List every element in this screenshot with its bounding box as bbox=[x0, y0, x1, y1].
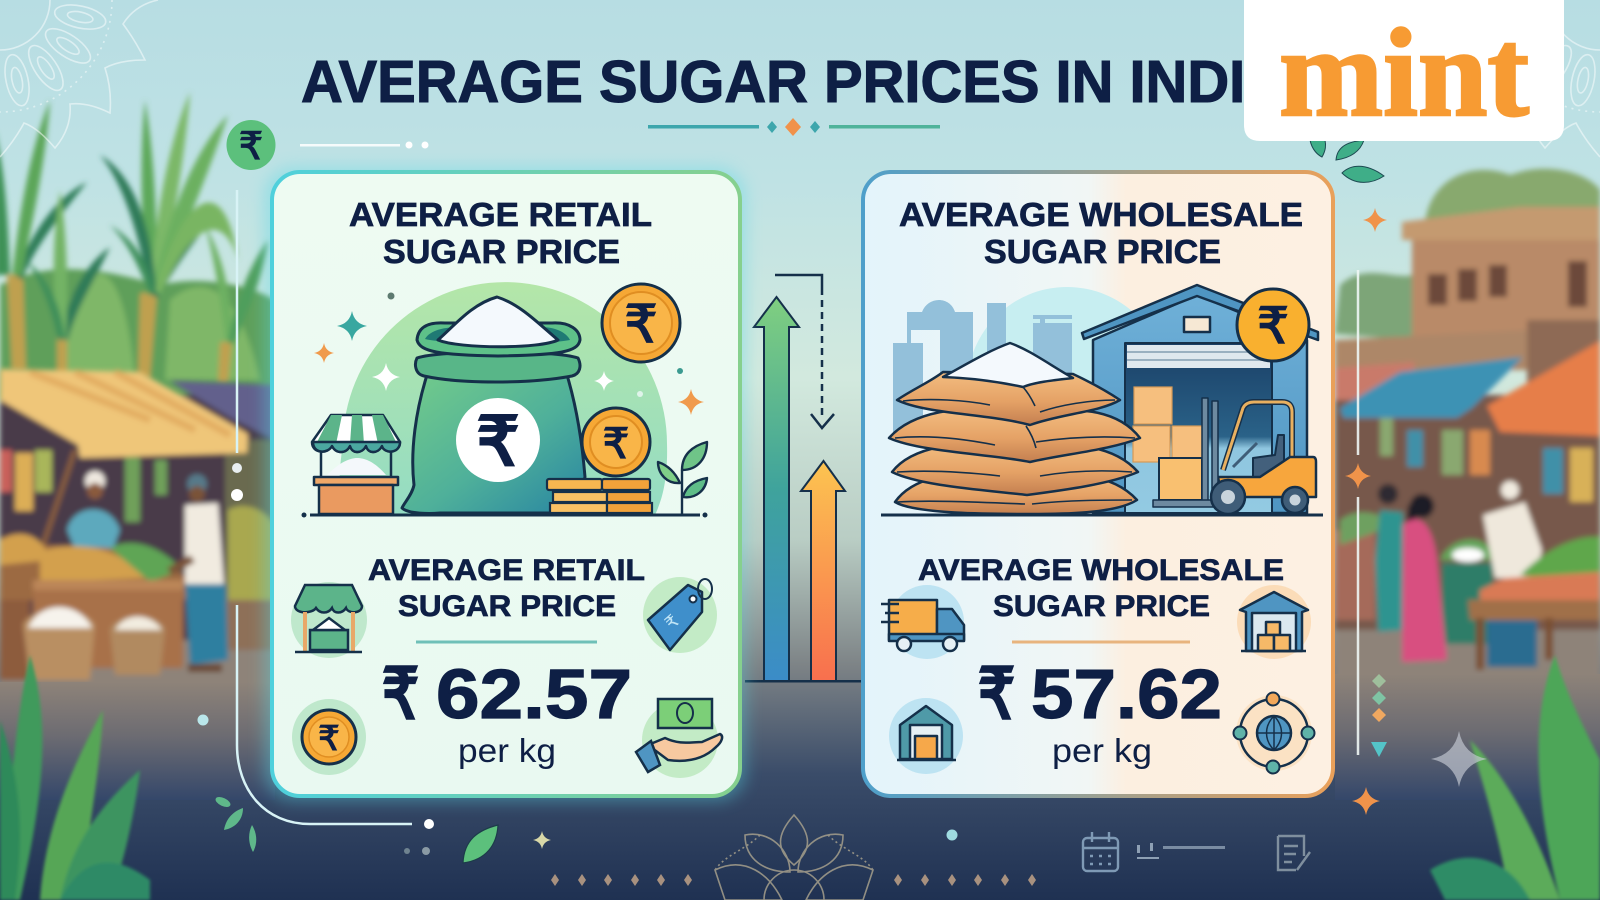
heading: retail bbox=[349, 196, 652, 270]
left card glow bbox=[264, 167, 746, 801]
icon: warehouse coin: ₹ bbox=[1257, 298, 1289, 354]
illustration: sugar bag scene bbox=[302, 282, 708, 518]
heading: retail: AVERAGE RETAIL bbox=[349, 196, 652, 233]
icon: small coin: ₹ bbox=[603, 420, 629, 467]
icon: warehouse coin bbox=[1237, 289, 1309, 361]
background: foreground plants bbox=[0, 655, 1600, 900]
subheading: wholesale bbox=[918, 554, 1284, 623]
icon: global network bbox=[1234, 692, 1314, 774]
decoration: small leaves bottom left bbox=[214, 795, 256, 852]
icon: green bag bbox=[402, 297, 585, 513]
background: left market stall bbox=[0, 369, 275, 700]
sugar sacks bbox=[889, 343, 1140, 514]
stacked boxes bbox=[1133, 387, 1202, 462]
icon: green rupee badge: ₹ bbox=[239, 126, 263, 168]
heading: retail: SUGAR PRICE bbox=[383, 233, 620, 270]
icon: truck badge bbox=[881, 585, 964, 659]
price: retail: ₹ bbox=[382, 655, 419, 733]
subheading: wholesale: AVERAGE WHOLESALE bbox=[918, 554, 1284, 587]
illustration: sugar bag scene: ₹ bbox=[476, 404, 520, 480]
icon: small coin bbox=[582, 408, 650, 476]
green blue arrow bbox=[754, 297, 799, 681]
decoration: right diamonds and triangle bbox=[1371, 674, 1387, 757]
icon: market stall bbox=[312, 415, 400, 514]
decoration: bottom diamond rows bbox=[551, 874, 1036, 886]
subheading: retail: AVERAGE RETAIL bbox=[368, 554, 645, 587]
subheading: retail: SUGAR PRICE bbox=[398, 590, 616, 623]
icon: price tag badge bbox=[643, 577, 717, 653]
decoration: left connector line bbox=[198, 190, 434, 855]
background: right ground bbox=[1335, 674, 1600, 800]
icon: large coin bbox=[602, 284, 680, 362]
price: wholesale: ₹ bbox=[978, 655, 1015, 733]
heading: wholesale: AVERAGE WHOLESALE bbox=[899, 196, 1303, 233]
icon: cash in hand bbox=[636, 699, 722, 778]
heading: wholesale bbox=[899, 196, 1303, 270]
panel: retail price card bbox=[272, 172, 740, 796]
decoration: white line and dots top left bbox=[300, 142, 428, 148]
decoration: top-right mandala bbox=[1442, 0, 1600, 157]
unit: per kg: per kg bbox=[1052, 732, 1152, 769]
icon: warehouse blue badge bbox=[889, 698, 963, 774]
decoration: top-left mandala bbox=[0, 0, 158, 157]
title: AVERAGE SUGAR PRICES IN INDIA bbox=[301, 49, 1287, 115]
icon: coin badge: ₹ bbox=[318, 720, 340, 758]
background: left ground bbox=[0, 682, 275, 800]
logo: mint: mint bbox=[1279, 4, 1529, 143]
icon: small star outline bbox=[533, 831, 551, 849]
skyline bbox=[893, 287, 1167, 487]
title ornament divider bbox=[648, 118, 940, 136]
icon: stall badge bbox=[291, 582, 367, 658]
center comparison arrows bbox=[745, 275, 863, 682]
illustration: warehouse scene bbox=[881, 285, 1323, 516]
background: sugarcane field bbox=[0, 92, 275, 400]
icon: green rupee badge bbox=[226, 120, 276, 170]
background: right market building bbox=[1335, 169, 1600, 690]
icon: calendar bbox=[1083, 832, 1118, 871]
forklift bbox=[1153, 398, 1316, 514]
icon: green leaf bbox=[463, 825, 498, 863]
price: retail: 62.57 bbox=[436, 655, 632, 733]
decoration: bottom-centre mandala bbox=[715, 815, 873, 900]
decoration: green leaves under logo bbox=[1310, 140, 1384, 182]
icon: price tag badge: ₹ bbox=[661, 611, 683, 633]
decoration: footer fading line bbox=[1137, 843, 1225, 859]
icon: warehouse tan badge bbox=[1237, 585, 1311, 659]
decoration: floating teal dot bbox=[946, 830, 958, 840]
icon: large coin: ₹ bbox=[624, 296, 658, 354]
unit: per kg: per kg bbox=[458, 732, 556, 769]
decoration: orange sparkles right bbox=[1345, 208, 1387, 815]
panel: wholesale price card bbox=[863, 172, 1333, 796]
dashed down arrow bbox=[775, 275, 834, 428]
warehouse bbox=[1082, 285, 1318, 513]
icon: coin stack bbox=[547, 479, 652, 513]
icon: coin badge bbox=[292, 699, 366, 775]
icon: notes bbox=[1278, 836, 1310, 870]
icon: plant bbox=[658, 442, 707, 515]
orange arrow bbox=[801, 461, 845, 681]
decoration: sparkles bbox=[314, 292, 704, 415]
decoration: large pale star bbox=[1431, 731, 1487, 787]
subheading: retail bbox=[368, 554, 645, 623]
divider bbox=[1012, 640, 1190, 644]
subheading: wholesale: SUGAR PRICE bbox=[993, 590, 1210, 623]
heading: wholesale: SUGAR PRICE bbox=[984, 233, 1221, 270]
divider bbox=[416, 640, 597, 644]
decoration: right connector line bbox=[1357, 270, 1359, 755]
price: wholesale: 57.62 bbox=[1031, 655, 1222, 733]
